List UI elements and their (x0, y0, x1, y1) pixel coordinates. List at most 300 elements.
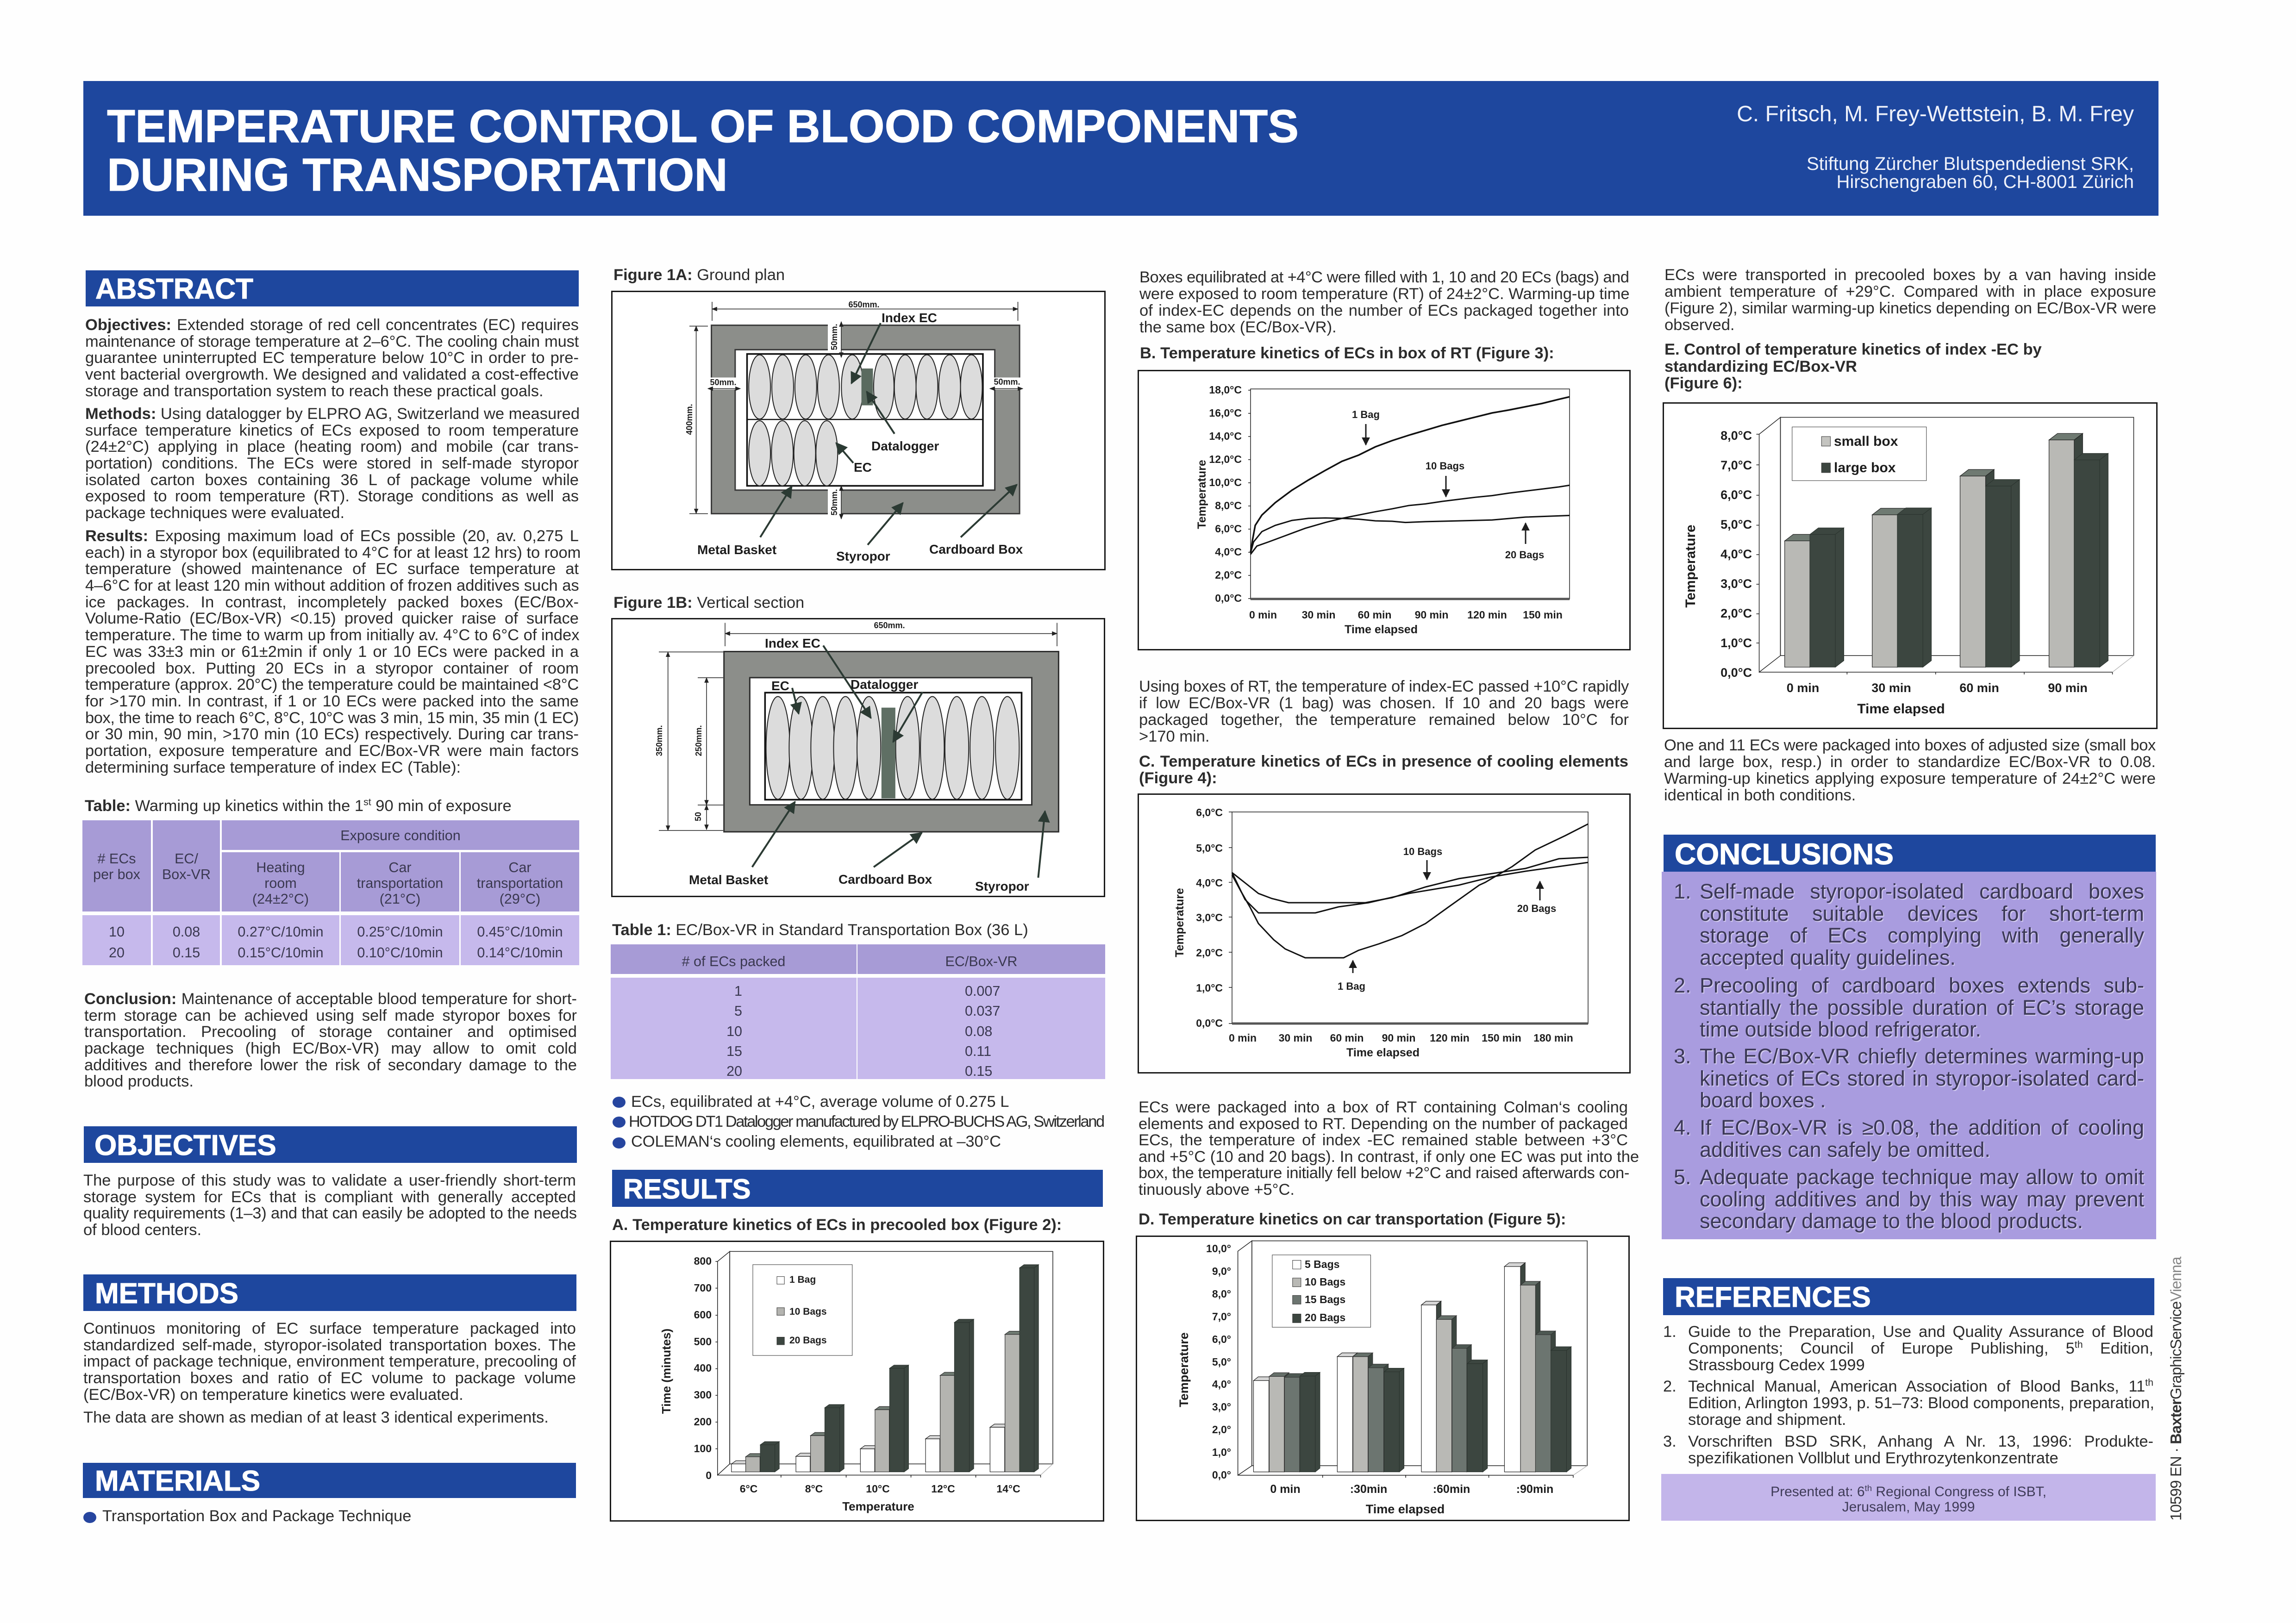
axis labels: 4,0°C (1196, 877, 1223, 889)
data: ECs packed: 20 (726, 1063, 742, 1079)
data: car 29 (461, 915, 579, 965)
axis labels: 6°C (740, 1483, 757, 1495)
curve: 10 bags (1251, 485, 1570, 554)
heading: section E: E. Control of temperature kinetics of index -EC by (1664, 341, 2042, 358)
figure 3: line chart (1138, 370, 1631, 650)
bars: large box (1810, 453, 2108, 667)
diagram labels (685, 300, 1023, 563)
table caption: Table: Warming up kinetics within the 1st 90 min of exposure (85, 796, 512, 815)
results text: cooling elements: and +5°C (10 and 20 bags). In contrast, if only one EC was put into the (1139, 1148, 1639, 1166)
abstract: methods: surface temperature kinetics of ECs exposed to room temperature (85, 422, 579, 439)
results text: cooling elements: elements and exposed to RT. Depending on the number of packaged (1139, 1115, 1628, 1132)
column header: car 21: Car (388, 860, 412, 875)
methods text: standardized self-made, styropor-isolated transportation boxes. The (83, 1336, 576, 1354)
objectives text: storage system for ECs that is compliant with generally accepted (83, 1188, 576, 1206)
text: 5. (1674, 1165, 1691, 1189)
axis labels: 0,0°C (1196, 1017, 1223, 1029)
reference 3 (1688, 1433, 2153, 1467)
abstract: results: box, the time to reach 6°C, 8°C, 10°C was 3 min, 15 min, 35 min (1 EC) (85, 709, 579, 727)
axis labels: 5,0° (1212, 1356, 1231, 1368)
axis labels: 30 min (1871, 681, 1911, 695)
legend: 10 Bags (1305, 1276, 1345, 1288)
heading: section E: standardizing EC/Box-VR (1664, 357, 1857, 375)
axis labels: 0,0°C (1215, 592, 1242, 604)
axis labels: :90min (1516, 1483, 1553, 1496)
axis labels: 2,0°C (1215, 569, 1242, 581)
axis labels: 5,0°C (1720, 518, 1752, 531)
column header: car 29 (461, 852, 579, 911)
chart frame (1238, 1241, 1587, 1478)
reference 2: storage and shipment. (1688, 1411, 1846, 1429)
curve callouts: 10 Bags (1403, 846, 1442, 857)
abstract: results: Volume-Ratio (EC/Box-VR) <0.15) proved quicker raise of surface (85, 610, 579, 627)
heading: section D: D. Temperature kinetics on car transportation (Figure 5): (1139, 1211, 1566, 1228)
data: ECs per box: 20 (109, 945, 125, 961)
materials bullet (83, 1508, 417, 1525)
abstract: results: temperature (approx. 20°C) the temperature could be maintained <8°C (85, 676, 579, 693)
conclusion 3 (1700, 1045, 2144, 1111)
results text: standardized ratio: identical in both conditions. (1664, 787, 1856, 804)
abstract: conclusion: package techniques (high EC/Box-VR) may allow to omit cold (84, 1040, 577, 1057)
axis labels: 0 min (1787, 681, 1819, 695)
figure 5: bar chart (1136, 1236, 1630, 1521)
abstract: objectives: Objectives: Extended storage of red cell concentrates (EC) requires (85, 316, 579, 334)
data: car 21 (341, 915, 459, 965)
results text: boxes of RT: >170 min. (1139, 728, 1209, 745)
axis labels: 0,0° (1212, 1469, 1231, 1481)
results text: van transport: ECs were transported in precooled boxes by a van having inside (1664, 266, 2156, 284)
figure 2: bar chart (610, 1241, 1104, 1522)
diagram labels: 50mm. (830, 324, 839, 350)
legend: 20 Bags (1305, 1311, 1345, 1323)
abstract: methods: package techniques were evaluated. (85, 504, 344, 522)
column header: car 21: transportation (357, 875, 443, 891)
data: car 29: 0.14°C/10min (477, 945, 563, 961)
results text: box warming: were exposed to room temperature (RT) of 24±2°C. Warming-up time (1139, 285, 1630, 303)
title (107, 102, 1299, 200)
diagram labels: 50 (694, 812, 703, 821)
axis labels: 7,0° (1212, 1311, 1231, 1323)
institution: Hirschengraben 60, CH-8001 Zürich (1836, 172, 2134, 192)
presented-at note: Jerusalem, May 1999 (1842, 1499, 1975, 1515)
conclusion 1: Self-made styropor-isolated cardboard boxes (1700, 880, 2144, 903)
header: ECs packed: # of ECs packed (682, 954, 785, 969)
text: 3. (1663, 1433, 1677, 1450)
bars: small box (1785, 433, 2083, 667)
axis labels: 4,0° (1212, 1378, 1231, 1390)
axis labels: 120 min (1467, 609, 1507, 621)
results text: box warming: of index-EC depends on the number of ECs packaged together into (1139, 302, 1629, 319)
methods text: The data are shown as median of at least 3 identical experiments. (83, 1409, 549, 1426)
axis labels: 8,0°C (1215, 499, 1242, 512)
axis labels: 500 (694, 1336, 712, 1348)
data: ECs per box (82, 915, 151, 965)
abstract: methods: (24±2°C) applying in place (heating room) and mobile (car trans- (85, 438, 579, 456)
methods text: (EC/Box-VR) on temperature kinetics were evaluated. (83, 1386, 463, 1404)
axis labels: Time elapsed (1345, 623, 1418, 636)
box walls (708, 322, 1024, 515)
bullet text: Transportation Box and Package Technique (102, 1507, 411, 1525)
axis labels: 200 (694, 1416, 712, 1428)
column header: heating room: Heating (256, 860, 305, 875)
diagram labels: 50mm. (830, 489, 839, 516)
conclusion 1: constitute suitable devices for short-term (1700, 902, 2144, 925)
results text: van transport: (Figure 2), similar warming-up kinetics depending on EC/Box-VR were (1664, 300, 2156, 317)
axis labels: 9,0° (1212, 1265, 1231, 1277)
data: ECs packed: 10 (726, 1023, 742, 1039)
axis labels: 30 min (1302, 609, 1335, 621)
abstract: objectives: storage and transportation system to reach these practical goals. (85, 382, 544, 400)
legend: 20 Bags (789, 1335, 827, 1346)
EC bags (766, 697, 1019, 799)
abstract: methods: isolated carton boxes containing 36 L of package volume while (85, 471, 579, 489)
axis labels: Time (minutes) (659, 1329, 673, 1414)
data: car 21: 0.10°C/10min (357, 945, 443, 961)
data: ECs packed: 1 (734, 983, 742, 999)
chart frame (715, 1251, 1053, 1478)
diagram labels: Styropor (836, 549, 890, 563)
diagram labels: 650mm. (874, 621, 905, 630)
methods text (83, 1321, 576, 1426)
axis labels: 0 min (1249, 609, 1277, 621)
axis labels: 14,0°C (1209, 430, 1242, 442)
diagram labels: Index EC (765, 636, 820, 650)
conclusion 5: cooling additives and by this way may prevent (1700, 1187, 2144, 1211)
axis labels: Temperature (1177, 1332, 1191, 1407)
curve callouts: 20 Bags (1517, 903, 1556, 914)
axis labels: 10°C (866, 1483, 890, 1495)
diagram labels: Metal Basket (689, 873, 768, 887)
legend: 1 Bag (789, 1274, 816, 1285)
axis labels: 2,0° (1212, 1423, 1231, 1436)
reference 1: Strassbourg Cedex 1999 (1688, 1356, 1865, 1374)
axis labels: 10,0° (1206, 1242, 1231, 1255)
heading: section C: (Figure 4): (1139, 769, 1217, 787)
axis labels: :30min (1350, 1483, 1387, 1496)
reference 1 (1688, 1323, 2153, 1373)
column header: ECs per box: # ECs (97, 851, 136, 867)
figure 1B: vertical section diagram (611, 618, 1105, 897)
axis labels: 60 min (1358, 609, 1391, 621)
legend: 15 Bags (1305, 1293, 1345, 1305)
axis labels: 400 (694, 1362, 712, 1374)
axis labels: Time elapsed (1366, 1502, 1445, 1516)
reference 3: Vorschriften BSD SRK, Anhang A Nr. 13, 1996: Produkte- (1688, 1433, 2153, 1450)
abstract: results: determining surface temperature of index EC (Table): (85, 759, 461, 776)
axis labels: 600 (694, 1309, 712, 1321)
data: ECs packed: 15 (726, 1043, 742, 1059)
heading: objectives (84, 1126, 577, 1163)
text: 1. (1663, 1323, 1677, 1341)
axis labels: 12,0°C (1209, 453, 1242, 465)
results text: standardized ratio (1664, 737, 2156, 804)
axis labels: 180 min (1533, 1032, 1573, 1044)
plot frame (1229, 812, 1588, 1024)
axis labels (1683, 429, 2088, 717)
text: 3. (1674, 1044, 1691, 1068)
axis labels: 90 min (1415, 609, 1448, 621)
curve callouts: 1 Bag (1338, 980, 1365, 992)
axis labels: 150 min (1482, 1032, 1521, 1044)
axis labels: 60 min (1959, 681, 1999, 695)
header: ECs packed (611, 944, 857, 974)
diagram labels: 400mm. (685, 404, 694, 435)
diagram labels: Datalogger (851, 677, 918, 692)
heading: section C: C. Temperature kinetics of ECs in presence of cooling elements (1139, 753, 1628, 770)
title banner (83, 81, 2158, 216)
axis labels: 1,0°C (1196, 982, 1223, 994)
figure 4: line chart (1138, 793, 1631, 1074)
results text: cooling elements: ECs, the temperature of index -EC remained stable between +3°C (1139, 1131, 1628, 1149)
diagram labels: 350mm. (655, 725, 664, 756)
axis labels: 1,0°C (1720, 636, 1752, 650)
axis labels: 30 min (1279, 1032, 1312, 1044)
column group header (222, 820, 579, 850)
print credit: 10599 EN · BaxterGraphicServiceVienna (2167, 1257, 2184, 1521)
abstract: results: Results: Exposing maximum load of ECs possible (20, av. 0,275 L (85, 527, 579, 545)
axis labels: Time elapsed (1857, 701, 1945, 717)
axis labels: 800 (694, 1255, 712, 1267)
column group header: Exposure condition (340, 828, 461, 843)
axis labels: Temperature (842, 1499, 914, 1513)
results text: van transport: ambient temperature of +29°C. Compared with in place exposure (1664, 283, 2156, 300)
axis labels: 3,0°C (1720, 577, 1752, 591)
results text: standardized ratio: and large box, resp.) in order to standardize EC/Box-VR to 0.08. (1664, 753, 2156, 771)
abstract: results: portation, exposure temperature and EC/Box-VR were main factors (85, 742, 579, 760)
results text: cooling elements: box, the temperature initially fell below +2°C and raised afterwards con- (1139, 1164, 1629, 1182)
data: ratio: 0.08 (173, 924, 200, 940)
results text: box warming: the same box (EC/Box-VR). (1139, 318, 1337, 336)
axis labels: 3,0°C (1196, 911, 1223, 924)
reference 2: Technical Manual, American Association of Blood Banks, 11th (1688, 1377, 2153, 1395)
panel: conclusions (1662, 872, 2156, 1239)
curve: 20 bags (1232, 862, 1588, 913)
abstract: results: each) in a styropor box (equilibrated to 4°C for at least 12 hrs) to room (85, 544, 581, 562)
heading: abstract (86, 270, 579, 306)
axis labels: 0 min (1270, 1483, 1301, 1496)
conclusion 2 (1700, 974, 2144, 1041)
results text: box warming: Boxes equilibrated at +4°C were filled with 1, 10 and 20 ECs (bags) and (1139, 268, 1629, 286)
column header: heating room: room (264, 875, 297, 891)
arrows (760, 323, 1017, 545)
axis labels: 18,0°C (1209, 384, 1242, 396)
presented-at note (1661, 1474, 2156, 1521)
bullet text: COLEMAN‘s cooling elements, equilibrated at –30°C (631, 1133, 1001, 1150)
abstract: results: 4–6°C for at least 120 min without addition of frozen additives such as (85, 577, 579, 594)
EC bags (749, 355, 982, 486)
conclusion 4: If EC/Box-VR is ≥0.08, the addition of cooling (1700, 1116, 2144, 1139)
axis labels: 2,0°C (1196, 947, 1223, 959)
curve: 10 bags (1232, 857, 1588, 903)
objectives text: of blood centers. (83, 1221, 201, 1239)
bars: 1 bag (732, 1424, 1009, 1472)
abstract: conclusion (84, 991, 577, 1090)
data: ratio: 0.08 (965, 1023, 992, 1039)
bullet dot (613, 1117, 626, 1128)
results text: van transport: observed. (1664, 316, 1735, 334)
axis labels (1195, 384, 1563, 636)
data: ECs packed: 5 (734, 1003, 742, 1019)
diagram labels: Datalogger (871, 439, 939, 453)
header: EC/Box-VR (857, 944, 1105, 974)
header: EC/Box-VR: EC/Box-VR (945, 954, 1017, 969)
heading: section A: A. Temperature kinetics of ECs in precooled box (Figure 2): (612, 1216, 1062, 1234)
methods text: transportation boxes and ratio of EC volume to package volume (83, 1369, 576, 1387)
results text: boxes of RT: packaged together, the temperature remained below 10°C for (1139, 711, 1629, 729)
figure 1A caption: Figure 1A: Ground plan (613, 266, 785, 284)
axis labels: 300 (694, 1389, 712, 1401)
reference 1: Guide to the Preparation, Use and Quality Assurance of Blood (1688, 1323, 2153, 1341)
abstract: results: temperature. The time to warm up from initially av. 4°C to 6°C of index (85, 626, 580, 644)
results text: van transport (1664, 267, 2156, 333)
data: ratio: 0.037 (965, 1003, 1000, 1019)
diagram labels: Metal Basket (697, 543, 776, 557)
diagram labels: Styropor (975, 879, 1029, 893)
axis labels: 60 min (1330, 1032, 1364, 1044)
axis labels: 6,0°C (1215, 523, 1242, 535)
column header: ECs per box: per box (93, 867, 140, 882)
column header: car 29: transportation (477, 875, 563, 891)
axis labels: 8,0°C (1720, 429, 1752, 443)
axis labels: 120 min (1430, 1032, 1470, 1044)
column header: heating room (222, 852, 339, 911)
methods text: Continuos monitoring of EC surface temperature packaged into (83, 1320, 576, 1337)
text: 4. (1674, 1116, 1691, 1139)
heading: results (612, 1170, 1103, 1207)
conclusion 3: board boxes . (1700, 1088, 1826, 1112)
abstract: results: EC was 33±3 min or 61±2min if only 1 or 10 ECs were packed in a (85, 643, 579, 661)
results text: standardized ratio: Warming-up kinetics applying exposure temperature of 24±2°C were (1664, 770, 2156, 787)
column header: car 29: Car (508, 860, 532, 875)
axis labels: :60min (1433, 1483, 1470, 1496)
abstract: methods: portation) conditions. The ECs were stored in self-made styropor (85, 455, 579, 472)
figure 6: bar chart (1663, 402, 2158, 729)
bullet dot (613, 1137, 626, 1149)
curve callouts (1352, 409, 1544, 561)
diagram labels: 50mm. (710, 378, 737, 387)
bullet dot (83, 1512, 96, 1523)
axis labels: 6,0° (1212, 1333, 1231, 1345)
axis labels: 16,0°C (1209, 407, 1242, 419)
data: ECs packed (611, 978, 857, 1079)
methods text: impact of package technique, environment temperature, precooling of (83, 1353, 576, 1370)
axis labels (1177, 1242, 1553, 1516)
title: TEMPERATURE CONTROL OF BLOOD COMPONENTS (107, 100, 1299, 152)
abstract: methods: exposed to room temperature (RT). Storage conditions as well as (85, 487, 579, 505)
authors: C. Fritsch, M. Frey-Wettstein, B. M. Frey (1737, 102, 2134, 126)
axis labels: 90 min (2048, 681, 2088, 695)
diagram labels: Cardboard Box (929, 542, 1023, 556)
materials list (613, 1094, 1106, 1150)
heading: materials: MATERIALS (95, 1465, 260, 1497)
conclusion 3: kinetics of ECs stored in styropor-isolated card- (1700, 1067, 2144, 1090)
abstract: results: temperature (showed maintenance of EC surface temperature at (85, 560, 579, 578)
results text: box warming (1139, 269, 1629, 336)
dimension lines (689, 302, 1023, 519)
axis labels: 700 (694, 1282, 712, 1294)
data: ratio: 0.15 (173, 945, 200, 961)
conclusion 5: secondary damage to the blood products. (1700, 1209, 2083, 1233)
diagram labels: EC (771, 679, 789, 693)
legend: large box (1834, 460, 1896, 475)
axis labels: 12°C (931, 1483, 955, 1495)
box walls (724, 651, 1058, 832)
data: ratio (857, 978, 1105, 1079)
objectives text (83, 1173, 576, 1239)
institution (1807, 155, 2134, 191)
table: warming up kinetics (82, 820, 579, 965)
curve: 20 bags (1251, 515, 1570, 553)
axis labels (659, 1255, 1020, 1513)
abstract: results (85, 528, 579, 776)
results text: cooling elements: tinuously above +5°C. (1139, 1180, 1295, 1198)
results text: boxes of RT: if low EC/Box-VR (1 bag) was chosen. If 10 and 20 bags were (1139, 694, 1629, 712)
column header: heating room: (24±2°C) (252, 891, 309, 907)
data: heating room (222, 915, 339, 965)
conclusion 3: The EC/Box-VR chiefly determines warming-up (1700, 1044, 2144, 1068)
abstract: results: ice packages. In contrast, incompletely packed boxes (EC/Box- (85, 593, 579, 611)
presented-at note: Presented at: 6th Regional Congress of ISBT, (1770, 1483, 2046, 1499)
conclusion 1: storage of ECs complying with generally (1700, 924, 2144, 947)
data: ratio (153, 915, 220, 965)
axis labels: Temperature (1195, 460, 1208, 529)
results text: standardized ratio: One and 11 ECs were packaged into boxes of adjusted size (small box (1664, 737, 2156, 754)
heading: section E: (Figure 6): (1664, 375, 1743, 392)
text: 2. (1663, 1378, 1677, 1395)
column header: EC/Box-VR: EC/ (175, 851, 198, 867)
plot frame (1248, 389, 1570, 599)
abstract: results: for >170 min. In contrast, if 1 or 10 ECs were packed into the same (85, 693, 579, 710)
heading: methods (83, 1274, 576, 1311)
abstract: conclusion: term storage can be achieved using self made styropor boxes for (84, 1007, 577, 1024)
heading: methods: METHODS (95, 1278, 238, 1310)
bars: 20 bags (760, 1265, 1039, 1472)
heading: abstract: ABSTRACT (95, 273, 253, 305)
reference 2 (1688, 1378, 2153, 1428)
data: ECs per box: 10 (109, 924, 125, 940)
abstract: objectives: vent bacterial overgrowth. We designed and validated a cost-effective (85, 366, 579, 383)
diagram labels: 50mm. (994, 377, 1020, 387)
diagram labels: Index EC (882, 311, 937, 325)
axis labels: 5,0°C (1196, 842, 1223, 854)
chart frame (1756, 417, 2133, 674)
abstract: objectives: guarantee uninterrupted EC temperature below 10°C in order to pre- (85, 349, 579, 367)
abstract: objectives: maintenance of storage temperature at 2–6°C. The cooling chain must (85, 333, 579, 350)
axis labels: 7,0°C (1720, 458, 1752, 472)
conclusion 5 (1700, 1166, 2144, 1232)
heading: conclusions (1664, 835, 2156, 872)
curve callouts: 10 Bags (1426, 460, 1464, 472)
data: car 21: 0.25°C/10min (357, 924, 443, 940)
data: car 29: 0.45°C/10min (477, 924, 563, 940)
reference 1: Components; Council of Europe Publishing, 5th Edition, (1688, 1339, 2153, 1357)
bars: 5 bags (1253, 1263, 1525, 1472)
bullet dot (613, 1097, 626, 1108)
heading: materials (83, 1463, 576, 1498)
bullet text: ECs, equilibrated at +4°C, average volume of 0.275 L (631, 1093, 1009, 1111)
conclusion 4 (1700, 1117, 2144, 1161)
heading: conclusions: CONCLUSIONS (1675, 837, 1894, 871)
axis labels: 1,0° (1212, 1446, 1231, 1458)
text: 1. (1674, 880, 1691, 903)
axis labels: 90 min (1382, 1032, 1415, 1044)
conclusion 2: Precooling of cardboard boxes extends sub- (1700, 974, 2144, 997)
bullet text: HOTDOG DT1 Datalogger manufactured by ELPRO-BUCHS AG, Switzerland (629, 1113, 1104, 1130)
conclusion 4: additives can safely be omitted. (1700, 1138, 1990, 1161)
abstract: conclusion: Conclusion: Maintenance of acceptable blood temperature for short- (84, 990, 577, 1008)
abstract: methods: Methods: Using datalogger by ELPRO AG, Switzerland we measured (85, 405, 580, 423)
heading: objectives: OBJECTIVES (94, 1130, 276, 1161)
